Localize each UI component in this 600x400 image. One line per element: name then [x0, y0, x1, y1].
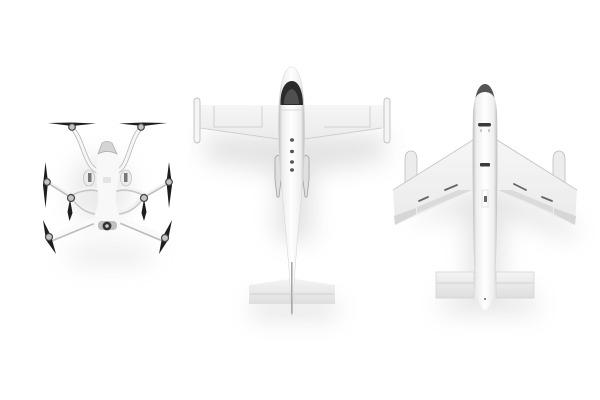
jet tailplane: [436, 272, 534, 298]
drone body: [92, 150, 122, 228]
jet flap tracks: [419, 184, 552, 201]
plane windows: [290, 138, 294, 172]
jet shadow: [405, 190, 575, 313]
drone arms: [48, 128, 169, 239]
plane wingtips: [194, 98, 390, 143]
jet cockpit: [476, 84, 494, 98]
plane tailplane: [249, 279, 335, 304]
drone camera: [98, 221, 117, 230]
jet fuselage: [473, 84, 497, 310]
jet aircraft: [393, 84, 577, 313]
plane shadow: [205, 135, 385, 318]
drone top sensor: [98, 142, 117, 154]
plane wings: [198, 105, 384, 141]
drone shadow: [64, 156, 156, 265]
drone side pods: [84, 170, 132, 186]
plane canopy: [280, 81, 303, 105]
jet fuselage details: [478, 123, 491, 300]
jet wings: [393, 140, 473, 225]
drone motors: [44, 124, 172, 242]
drone propellers: [43, 122, 172, 254]
plane nacelles: [275, 156, 309, 197]
plane fuselage: [279, 67, 305, 316]
jet engines: [405, 151, 565, 185]
drone: [43, 122, 172, 265]
propeller plane: [194, 67, 390, 318]
